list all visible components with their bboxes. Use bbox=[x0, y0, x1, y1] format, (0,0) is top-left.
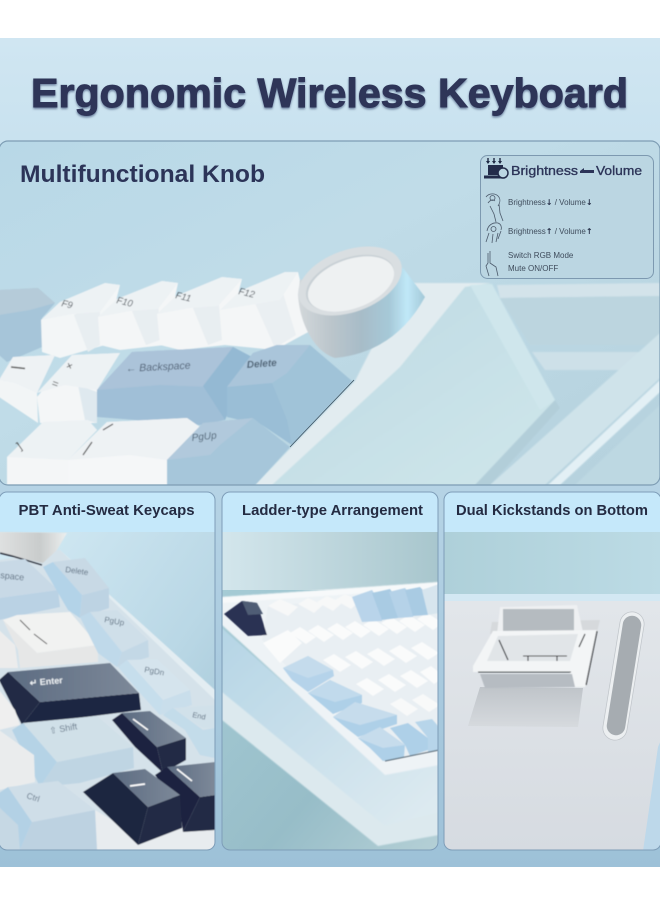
legend: knob controls bbox=[480, 156, 654, 278]
key: Shift bbox=[12, 716, 134, 787]
heading: PBT: PBT Anti-Sweat Keycaps bbox=[18, 502, 194, 519]
title: Ergonomic Wireless Keyboard bbox=[31, 70, 628, 116]
blue side keys bbox=[283, 656, 439, 761]
key: PgUp bbox=[167, 418, 290, 485]
key: Ctrl bbox=[0, 781, 97, 850]
key: up arrow bbox=[112, 711, 186, 773]
icon: aluminium knob bbox=[298, 246, 426, 358]
key: F12 bbox=[220, 272, 312, 350]
heading: multifunctional knob: Multifunctional Knob bbox=[20, 161, 265, 188]
text: brightness down: Brightness↓ / Volume↓ bbox=[508, 198, 593, 207]
text: brightness up: Brightness↑ / Volume↑ bbox=[508, 227, 593, 236]
legend heading: Brightness bbox=[511, 163, 579, 178]
legend heading: Volume bbox=[596, 163, 642, 178]
key: F9: F9 bbox=[60, 298, 74, 312]
key: F9 bbox=[41, 283, 120, 358]
key: Shift: ⇧ Shift bbox=[49, 721, 78, 736]
key: Backspace bbox=[0, 559, 60, 620]
key: Enter bbox=[0, 663, 141, 725]
kickstand shadow bbox=[468, 687, 583, 727]
keyboard angle photo bbox=[222, 532, 445, 852]
icon: finger pressing bbox=[486, 251, 498, 276]
panel: ladder-type arrangement bbox=[222, 492, 445, 852]
key: Delete bbox=[43, 558, 109, 618]
key: equals bbox=[37, 353, 120, 423]
key: F11 bbox=[157, 277, 242, 350]
heading: dual kickstands: Dual Kickstands on Bottom bbox=[456, 502, 648, 519]
icon: hand turning right bbox=[486, 223, 501, 243]
panel: dual kickstands bbox=[444, 492, 660, 851]
key: bracket: ] bbox=[15, 441, 24, 452]
blue function keys bbox=[352, 584, 439, 622]
key: F11: F11 bbox=[174, 290, 192, 305]
key: F12: F12 bbox=[237, 286, 257, 301]
key: white slash bbox=[3, 612, 98, 668]
kickstand recess bbox=[473, 605, 600, 688]
text: switch RGB mode: Switch RGB Mode bbox=[508, 251, 574, 260]
key: Backspace: ← Backspace bbox=[126, 360, 191, 375]
key: down arrow bbox=[155, 762, 215, 832]
key: Delete bbox=[227, 345, 352, 445]
panel: multifunctional knob bbox=[0, 141, 660, 485]
dark escape key bbox=[224, 601, 267, 636]
keycap photo bbox=[0, 532, 216, 850]
key: equals: = bbox=[50, 378, 60, 391]
text: mute on off: Mute ON/OFF bbox=[508, 264, 558, 273]
oval slot bbox=[615, 624, 632, 728]
key: Backspace: space bbox=[0, 570, 25, 583]
white keycaps bbox=[262, 594, 445, 760]
key: PgDn: PgDn bbox=[144, 665, 165, 677]
key: End bbox=[164, 710, 214, 758]
key: blue bbox=[0, 288, 55, 362]
key: minus bbox=[0, 355, 55, 423]
kickstand photo bbox=[444, 532, 660, 851]
key: Ctrl: Ctrl bbox=[25, 790, 41, 804]
key: Delete: Delete bbox=[246, 358, 278, 371]
key: equals: + bbox=[63, 358, 76, 374]
heading: ladder-type: Ladder-type Arrangement bbox=[242, 502, 423, 519]
key: bracket bbox=[7, 420, 97, 485]
key: PgUp: PgUp bbox=[104, 615, 125, 628]
icon: hand turning left bbox=[486, 194, 503, 222]
key: Delete: Delete bbox=[65, 565, 89, 577]
key: F10: F10 bbox=[115, 295, 135, 310]
key: F10 bbox=[98, 281, 178, 350]
key: slash bbox=[68, 418, 200, 485]
keycaps top panel bbox=[0, 272, 352, 485]
key: PgUp bbox=[80, 610, 149, 667]
keyboard photo with knob bbox=[0, 233, 660, 485]
icon: keyboard with knob bbox=[484, 158, 508, 178]
key: PgDn bbox=[118, 659, 192, 715]
key: left arrow bbox=[83, 769, 182, 845]
key: Enter: ↵ Enter bbox=[29, 675, 64, 688]
key: PgUp: PgUp bbox=[191, 430, 218, 444]
key: End: End bbox=[192, 710, 207, 722]
panel: PBT anti-sweat keycaps bbox=[0, 492, 216, 850]
key: Backspace bbox=[97, 347, 252, 425]
legend heading bbox=[511, 163, 642, 178]
